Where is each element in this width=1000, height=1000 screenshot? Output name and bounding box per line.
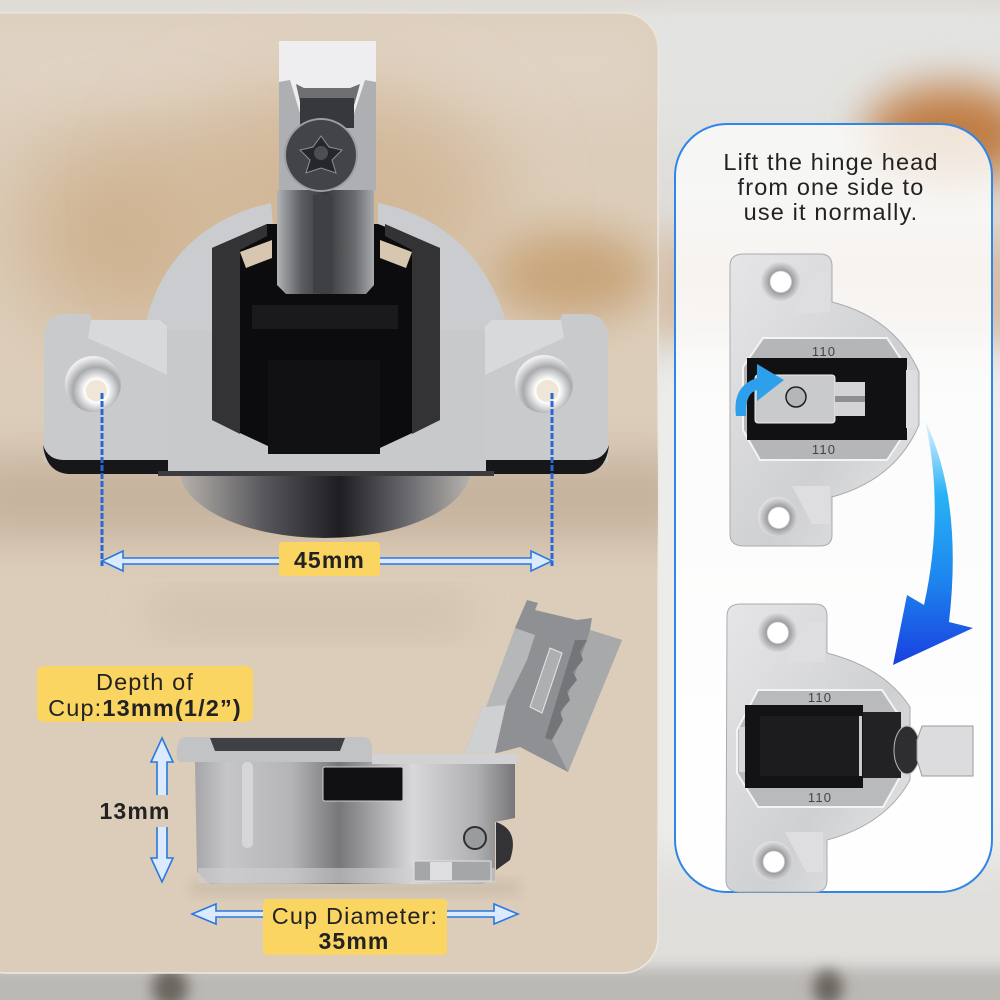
45mm dimension: 45mm — [294, 547, 365, 573]
arrow: curved blue — [893, 420, 973, 665]
hinge open: 110 — [808, 790, 832, 805]
instruction text: from one side to — [738, 174, 924, 200]
instruction text: use it normally. — [744, 199, 918, 225]
hinge closed — [730, 254, 919, 546]
hinge open — [726, 604, 973, 892]
panel: left hinge dimensions — [0, 13, 690, 973]
black opening — [212, 224, 440, 454]
raised arm — [465, 600, 622, 772]
icon: lift arrow — [735, 364, 784, 416]
hinge closed: 110 — [812, 442, 836, 457]
hinge side view — [177, 600, 622, 884]
flange — [177, 737, 372, 762]
cup body — [195, 762, 515, 884]
13mm dimension — [96, 738, 174, 882]
window — [323, 767, 403, 801]
panel: usage instructions — [675, 124, 992, 892]
hinge top view — [43, 41, 609, 538]
screw — [284, 118, 358, 192]
depth callout — [37, 666, 253, 722]
cup diameter dimension: 35mm — [318, 928, 390, 954]
45mm dimension — [102, 393, 552, 576]
arm — [277, 190, 374, 294]
hinge cup underside — [179, 398, 471, 538]
depth callout: Depth of — [96, 669, 194, 695]
depth callout: Cup:13mm(1/2”) — [48, 695, 242, 721]
cup diameter dimension: Cup Diameter: — [272, 903, 438, 929]
right wing — [485, 314, 609, 474]
left wing — [43, 314, 168, 474]
hinge open: 110 — [808, 690, 832, 705]
central frame — [156, 330, 498, 473]
instruction text: Lift the hinge head — [723, 149, 939, 175]
hinge head — [279, 41, 376, 190]
13mm dimension: 13mm — [99, 798, 171, 824]
round plate — [147, 203, 505, 470]
instruction text — [723, 149, 939, 225]
hinge closed: 110 — [812, 344, 836, 359]
cup diameter dimension — [192, 899, 518, 955]
